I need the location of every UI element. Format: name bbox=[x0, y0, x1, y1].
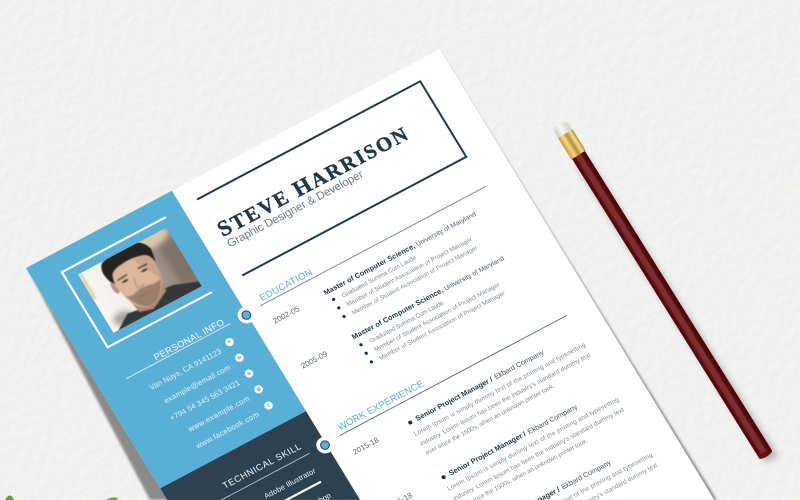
personal info divider bbox=[126, 324, 230, 379]
job one: Senior Project Manager / bbox=[414, 375, 494, 423]
connector dot: education bbox=[234, 304, 258, 326]
pencil shadow bbox=[576, 158, 778, 463]
education divider bbox=[261, 186, 486, 306]
paper shadow bbox=[28, 52, 717, 500]
work entries bbox=[351, 329, 661, 500]
degree one: University of Maryland bbox=[415, 211, 478, 248]
leaves at bottom bbox=[5, 496, 118, 500]
technical skill divider bbox=[205, 453, 310, 500]
connector dot: work bbox=[313, 434, 337, 456]
degree two bbox=[350, 253, 522, 368]
skill: adobe illustrator: Adobe Illustrator bbox=[262, 466, 318, 500]
job three: Ekbard Company bbox=[559, 458, 613, 491]
job one: 2015-18 bbox=[351, 436, 381, 456]
resume sheet bbox=[26, 49, 714, 500]
email: example@email.com bbox=[162, 363, 232, 405]
job one: Ekbard Company bbox=[492, 348, 546, 381]
education entries bbox=[271, 209, 522, 395]
date 2002-05: 2002-05 bbox=[271, 304, 302, 325]
photo frame bbox=[62, 217, 212, 347]
pencil ferrule bbox=[558, 129, 586, 160]
job one bbox=[351, 329, 599, 485]
degree two: Graduated Summa Cum Laude bbox=[368, 300, 446, 345]
heading: education: EDUCATION bbox=[258, 267, 315, 304]
job two: Ekbard Company bbox=[526, 402, 579, 436]
degree one: Member of Student Association of Project Manager bbox=[345, 236, 474, 308]
degree two: Master of Computer Science, bbox=[350, 286, 445, 341]
degree one: Graduated Summa Cum Laude bbox=[341, 254, 418, 299]
header frame bbox=[196, 81, 466, 276]
pencil bbox=[552, 120, 774, 461]
heading: technical skill: TECHNICAL SKILL bbox=[221, 442, 303, 491]
job one: ever since the 1500s, when an unknown printer took. bbox=[424, 383, 556, 457]
degree one: Master of Computer Science, bbox=[322, 242, 417, 297]
job two: industry. Lorem Ipsum has been the industry's standard dummy text bbox=[452, 406, 626, 500]
job three bbox=[472, 439, 661, 500]
degree two: University of Maryland bbox=[443, 255, 506, 293]
pencil eraser bbox=[553, 120, 573, 139]
job two bbox=[384, 384, 632, 500]
degree two: Member of Student Association of Project Manager bbox=[378, 290, 507, 362]
contact list bbox=[148, 347, 261, 455]
panel: sidebar dark bbox=[160, 411, 360, 500]
phone: +794 54 345 563 3421 bbox=[168, 378, 242, 422]
job one: Lorem Ipsum is simply dummy text of the printing and typesetting bbox=[413, 341, 587, 438]
facebook: www.facebook.com bbox=[193, 410, 261, 451]
contact icons bbox=[224, 336, 274, 411]
degree two: Member of Student Association of Project Manager bbox=[373, 281, 501, 353]
face bbox=[100, 242, 162, 308]
job subtitle: Graphic Designer & Developer bbox=[225, 169, 366, 250]
degree one: Member of Student Association of Project Manager bbox=[351, 245, 479, 317]
job two: Senior Project Manager / bbox=[447, 430, 528, 477]
portrait photo bbox=[78, 228, 202, 333]
heading: personal info: PERSONAL INFO bbox=[152, 317, 226, 362]
jacket bbox=[118, 281, 202, 330]
name title: STEVE HARRISON bbox=[212, 121, 412, 241]
heading: work experience: WORK EXPERIENCE bbox=[336, 379, 426, 433]
work divider bbox=[340, 315, 567, 436]
neck bbox=[130, 281, 167, 312]
pencil end bbox=[758, 448, 773, 460]
address: Van Nuys, CA 9141123 bbox=[148, 347, 223, 392]
panel: sidebar blue bbox=[26, 191, 306, 488]
pencil body bbox=[572, 151, 772, 458]
date 2005-09: 2005-09 bbox=[299, 349, 329, 370]
website: www.example.com bbox=[186, 394, 251, 434]
job two: Lorem Ipsum is simply dummy text of the printing and typesetting bbox=[446, 396, 621, 493]
sheet background bbox=[26, 49, 714, 500]
degree one bbox=[322, 209, 494, 323]
job one: industry. Lorem Ipsum has been the industry's standard dummy text bbox=[419, 352, 592, 448]
